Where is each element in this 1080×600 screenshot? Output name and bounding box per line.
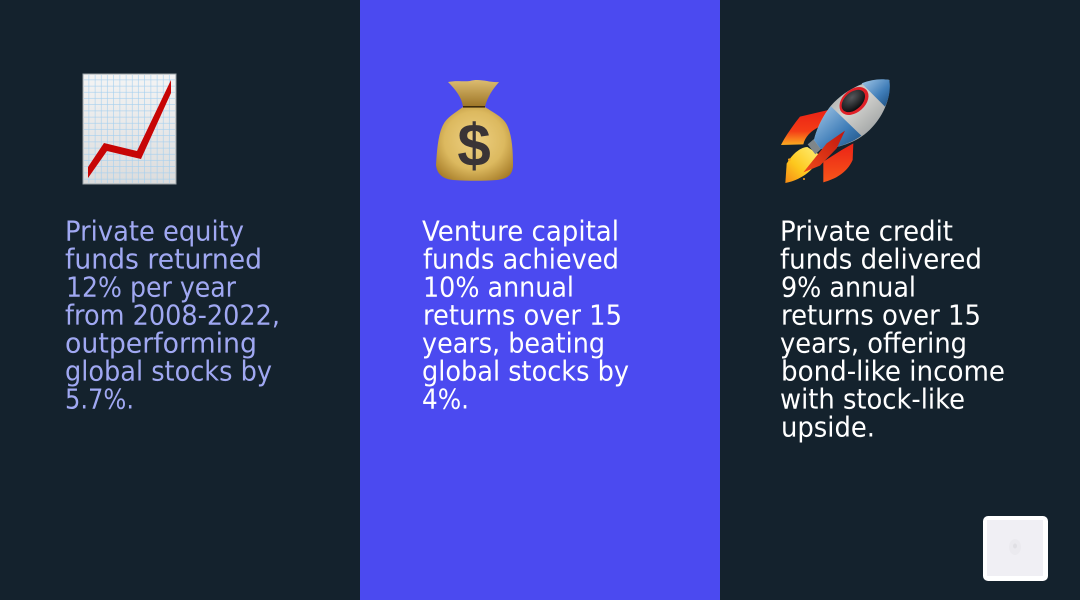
panel: venture capital <box>360 0 720 600</box>
text: venture capital returns: 10% annual <box>423 272 574 304</box>
text: venture capital returns <box>422 216 629 416</box>
text: private equity returns: from 2008-2022, <box>65 300 280 332</box>
text: private credit returns: funds delivered <box>780 244 982 276</box>
text: venture capital returns: Venture capital <box>422 216 619 248</box>
text: venture capital returns: global stocks by <box>422 356 629 388</box>
text: private credit returns: years, offering <box>780 328 967 360</box>
text: venture capital returns: funds achieved <box>423 244 619 276</box>
text: private equity returns: outperforming <box>65 328 257 360</box>
text: private equity returns <box>65 216 280 416</box>
text: private credit returns: bond-like income <box>781 356 1005 388</box>
text: private credit returns <box>780 216 1005 444</box>
text: venture capital returns: returns over 15 <box>423 300 622 332</box>
badge: corner logo <box>983 516 1048 581</box>
text: private equity returns: 12% per year <box>66 272 237 304</box>
text: private equity returns: 5.7%. <box>65 384 134 416</box>
dollar sign: $ <box>457 112 491 179</box>
text: private credit returns: with stock-like <box>780 384 965 416</box>
icon: rocket <box>781 79 890 183</box>
icon: money bag <box>436 80 513 181</box>
text: private credit returns: Private credit <box>780 216 953 248</box>
icon: rising chart <box>83 74 176 184</box>
text: private credit returns: 9% annual <box>781 272 916 304</box>
text: venture capital returns: years, beating <box>422 328 605 360</box>
text: private equity returns: Private equity <box>65 216 244 248</box>
text: private equity returns: global stocks by <box>65 356 272 388</box>
panel: private credit <box>720 0 1080 600</box>
text: private credit returns: returns over 15 <box>781 300 981 332</box>
panel: private equity <box>0 0 360 600</box>
text: private equity returns: funds returned <box>65 244 262 276</box>
text: private credit returns: upside. <box>781 412 875 444</box>
text: venture capital returns: 4%. <box>422 384 469 416</box>
